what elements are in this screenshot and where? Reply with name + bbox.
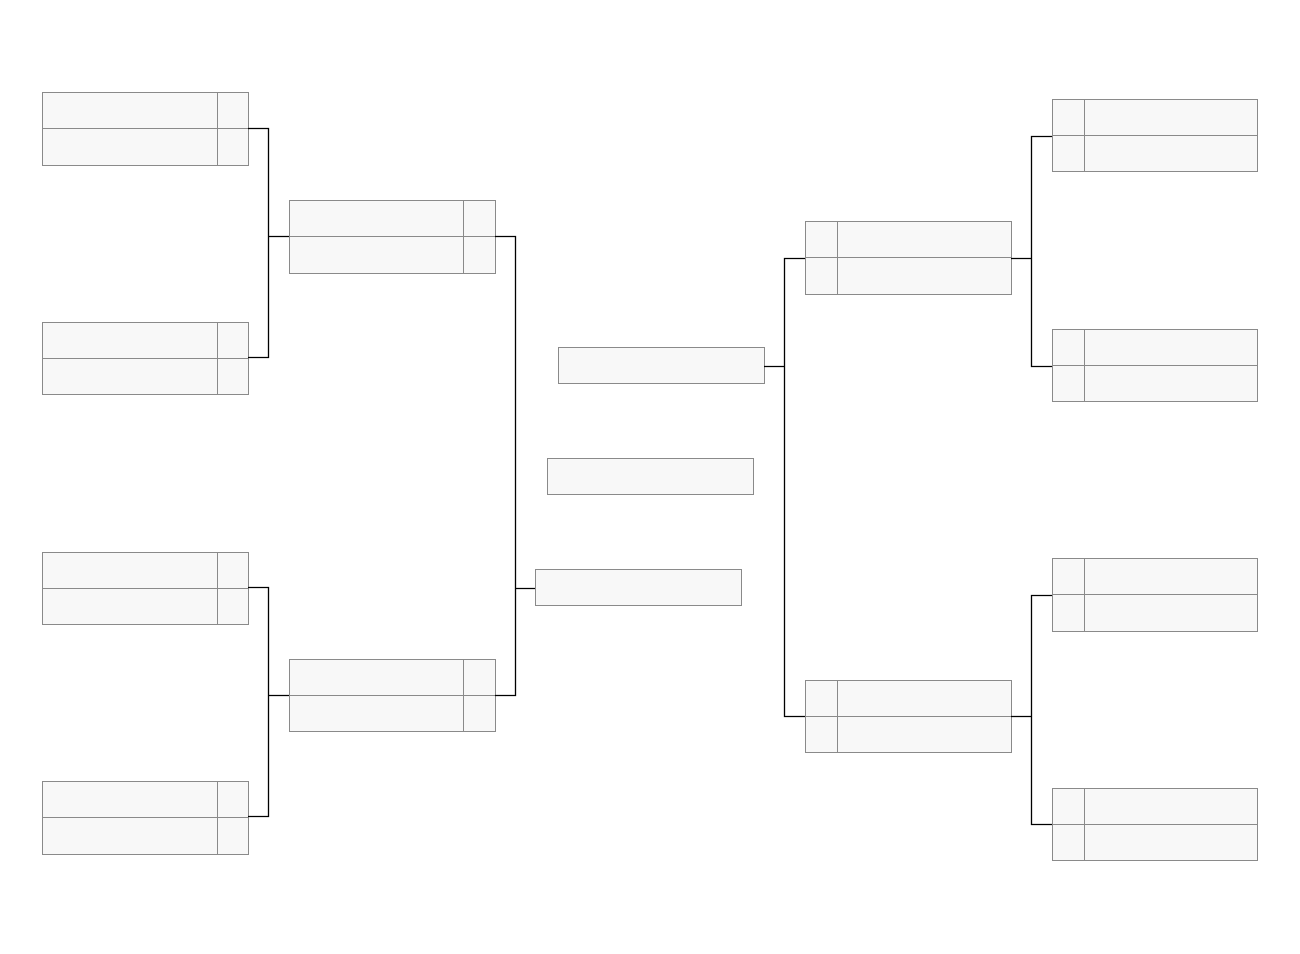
left round 2 connector [495,236,535,696]
right round 2 connector [764,258,805,716]
left round 2 boxes [290,200,496,732]
center boxes [536,348,764,606]
left round 1 connectors [248,128,289,816]
right round 2 boxes [806,222,1012,752]
left round 1 boxes [42,92,248,854]
right round 1 boxes [1052,100,1258,860]
right round 1 connectors [1011,136,1052,824]
